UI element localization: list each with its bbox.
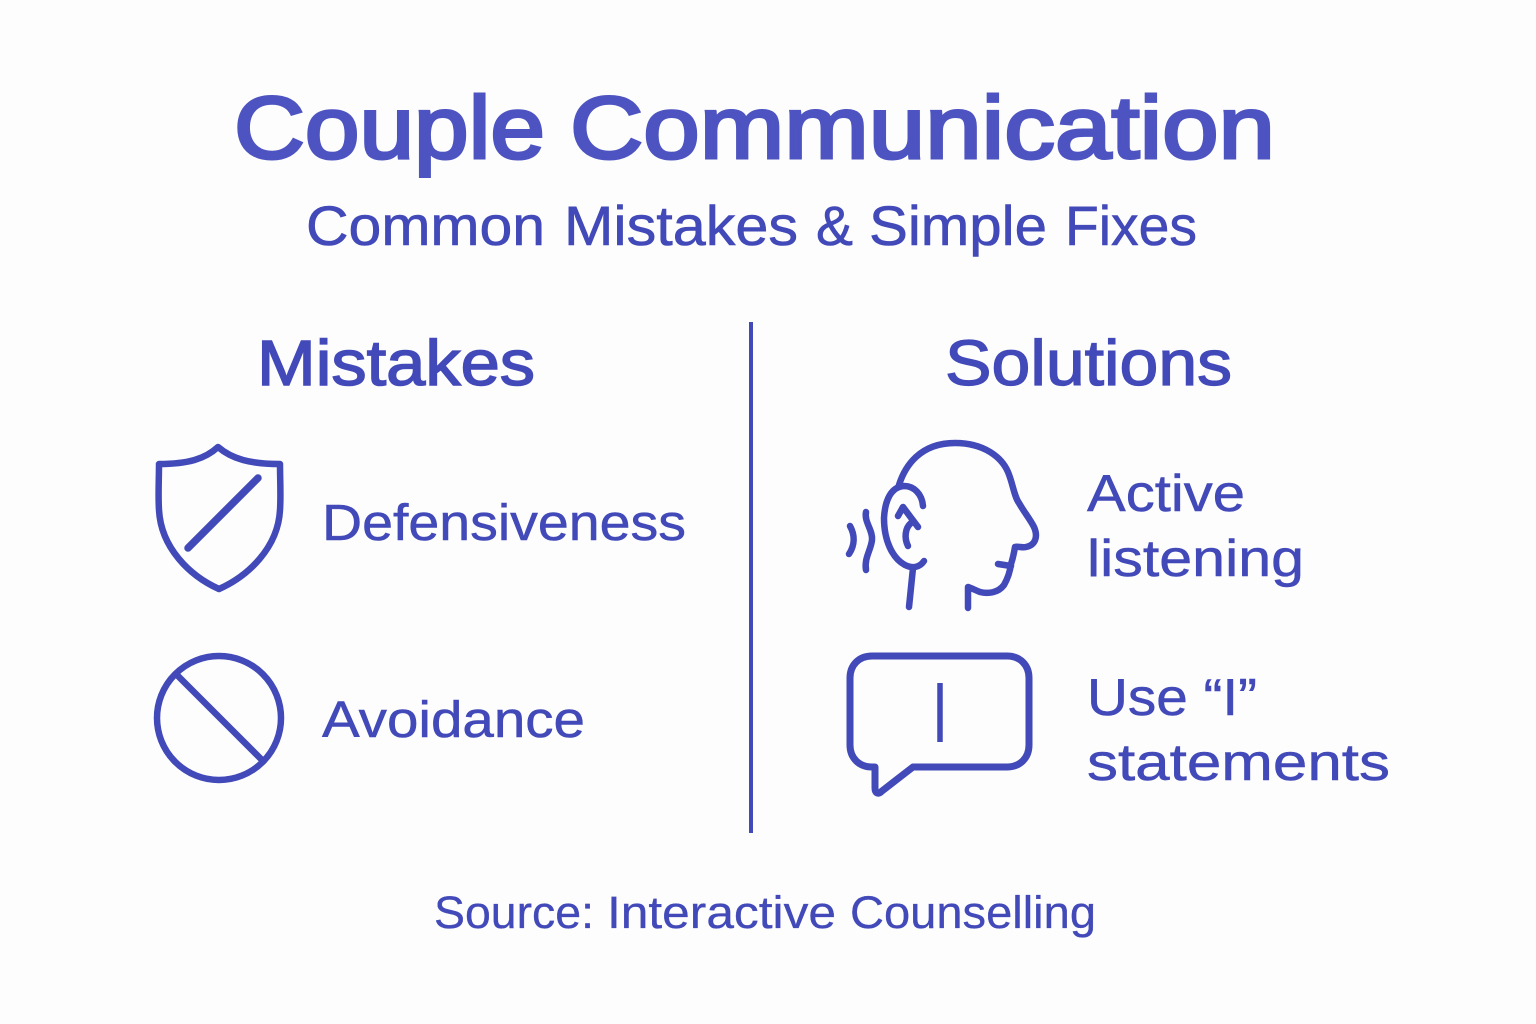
- source line: Interactive: [607, 887, 836, 938]
- panel: solutions: [849, 327, 1390, 793]
- label: use I statements: Use “I”: [1087, 669, 1257, 727]
- centre divider: [749, 322, 753, 833]
- label: avoidance: Avoidance: [322, 691, 585, 748]
- heading: mistakes: Mistakes: [257, 327, 535, 399]
- panel: mistakes: [157, 327, 686, 780]
- subtitle: Mistakes: [564, 194, 798, 257]
- title: [234, 78, 1275, 177]
- subtitle: Common: [306, 194, 545, 257]
- label: active listening: listening: [1087, 530, 1304, 588]
- source line: [434, 887, 1096, 938]
- title: Communication: [570, 78, 1275, 177]
- subtitle: Fixes: [1065, 194, 1197, 257]
- subtitle: &: [816, 194, 853, 257]
- icon: head with ear and sound waves: [849, 443, 1036, 608]
- label: use I statements: [1087, 669, 1390, 792]
- subtitle: Simple: [869, 194, 1047, 257]
- icon: shield with slash: [159, 447, 280, 589]
- label: active listening: Active: [1087, 465, 1245, 523]
- label: defensiveness: Defensiveness: [322, 494, 686, 551]
- title: Couple: [234, 78, 545, 177]
- source line: Source:: [434, 887, 594, 938]
- heading: solutions: Solutions: [945, 327, 1232, 399]
- subtitle: [306, 194, 1197, 257]
- label: active listening: [1087, 465, 1304, 588]
- source line: Counselling: [850, 887, 1096, 938]
- icon: speech bubble with I: [850, 656, 1029, 793]
- label: use I statements: statements: [1087, 734, 1390, 792]
- icon: prohibition circle: [157, 656, 281, 780]
